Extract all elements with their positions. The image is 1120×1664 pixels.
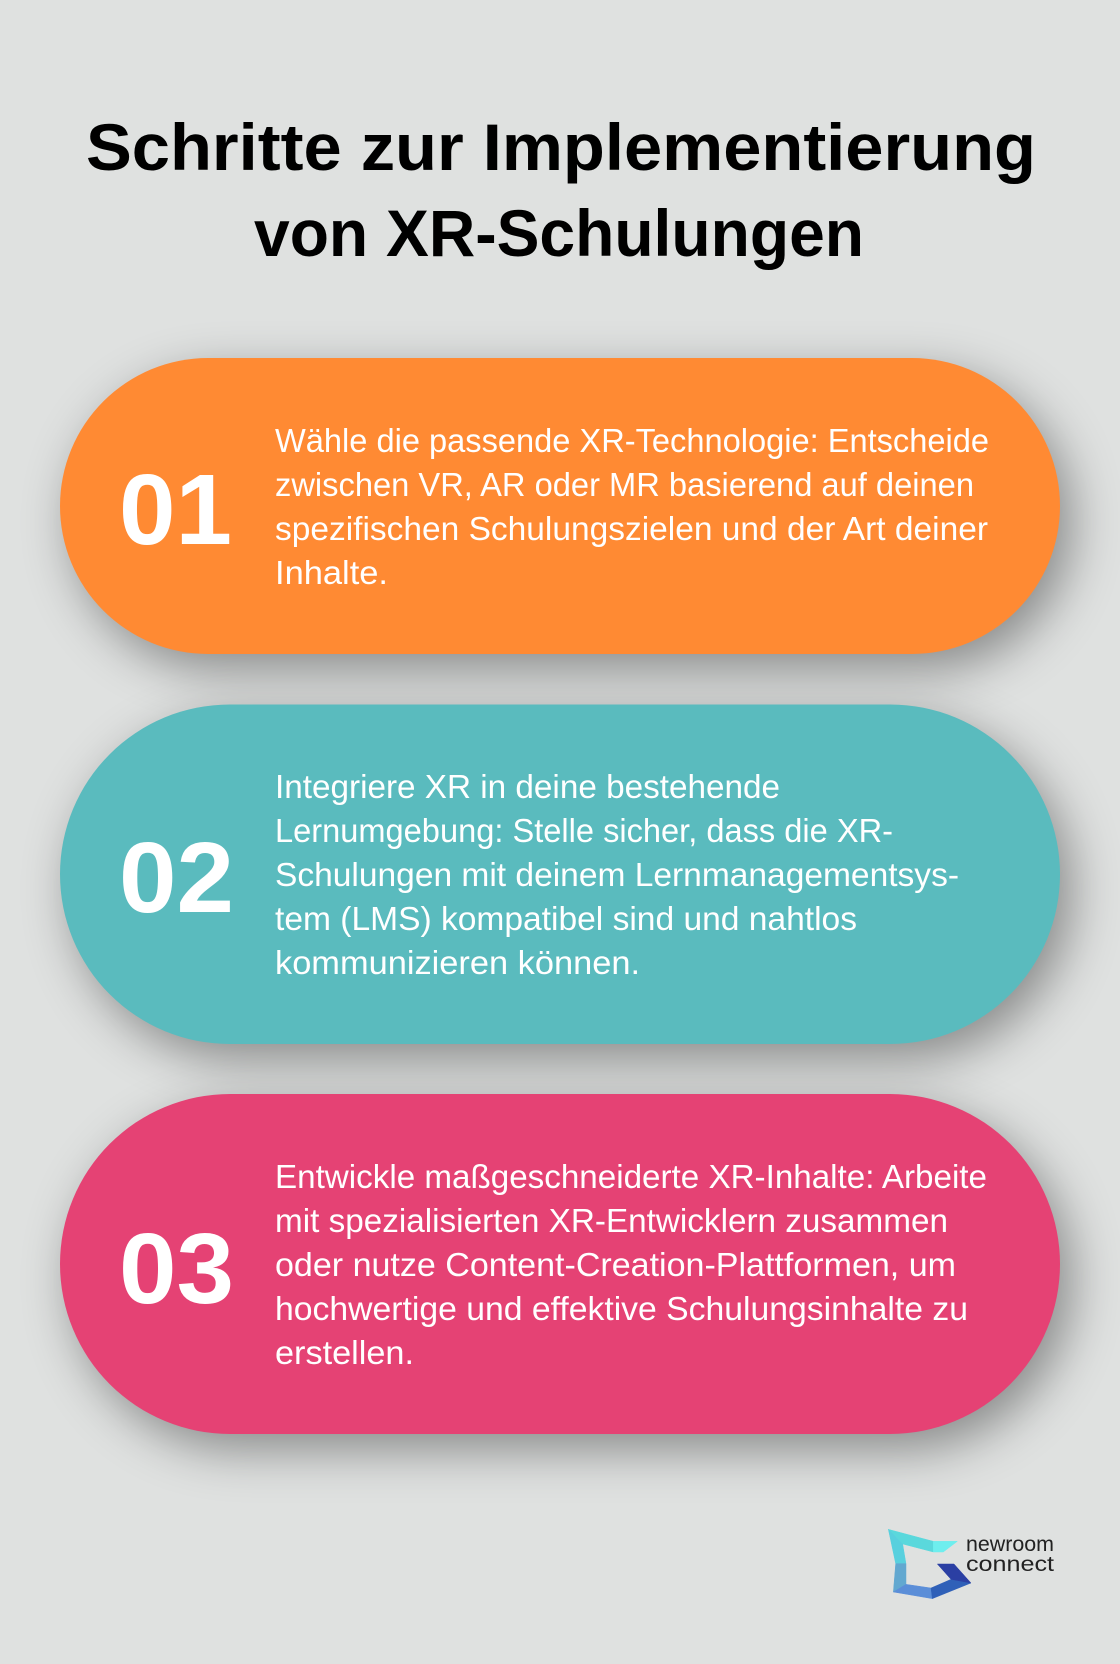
logo wordmark: newroom xyxy=(966,1533,1054,1556)
logo wordmark: connect xyxy=(966,1553,1054,1576)
pink pill background xyxy=(60,1094,1060,1434)
step 03 text xyxy=(275,1158,987,1371)
step 02 text: kommunizieren können. xyxy=(275,944,640,981)
logo: newroom connect xyxy=(888,1529,1054,1599)
step 02 text: Integriere XR in deine bestehende xyxy=(275,768,780,805)
step 03 text: oder nutze Content-Creation-Plattformen, um xyxy=(275,1246,956,1283)
step 02 text: Schulungen mit deinem Lernmanagementsys- xyxy=(275,856,959,893)
icon: logo mark xyxy=(888,1529,971,1599)
step 03 text: mit spezialisierten XR-Entwicklern zusammen xyxy=(275,1202,948,1239)
title: Schritte zur Implementierung xyxy=(86,110,1036,184)
step 01 text: Wähle die passende XR-Technologie: Entscheide xyxy=(275,422,989,459)
step 03 text: erstellen. xyxy=(275,1334,414,1371)
teal pill background xyxy=(60,704,1060,1044)
step number 03: 03 xyxy=(119,1213,234,1325)
panel: step 03 xyxy=(60,1094,1060,1434)
step 02 text: tem (LMS) kompatibel sind und nahtlos xyxy=(275,900,857,937)
logo wordmark xyxy=(966,1533,1054,1576)
step 03 text: hochwertige und effektive Schulungsinhalte zu xyxy=(275,1290,968,1327)
title xyxy=(86,110,1036,270)
step 01 text: zwischen VR, AR oder MR basierend auf deinen xyxy=(275,466,974,503)
step 03 text: Entwickle maßgeschneiderte XR-Inhalte: Arbeite xyxy=(275,1158,987,1195)
panel: step 01 xyxy=(60,358,1060,654)
step number 02: 02 xyxy=(119,822,234,934)
title: von XR-Schulungen xyxy=(254,196,864,270)
orange pill background xyxy=(60,358,1060,654)
step 01 text: Inhalte. xyxy=(275,554,388,591)
panel: step 02 xyxy=(60,704,1060,1044)
step 02 text xyxy=(275,768,959,981)
step 01 text xyxy=(275,422,989,591)
step 02 text: Lernumgebung: Stelle sicher, dass die XR- xyxy=(275,812,893,849)
step number 01: 01 xyxy=(119,454,232,566)
step 01 text: spezifischen Schulungszielen und der Art deiner xyxy=(275,510,988,547)
